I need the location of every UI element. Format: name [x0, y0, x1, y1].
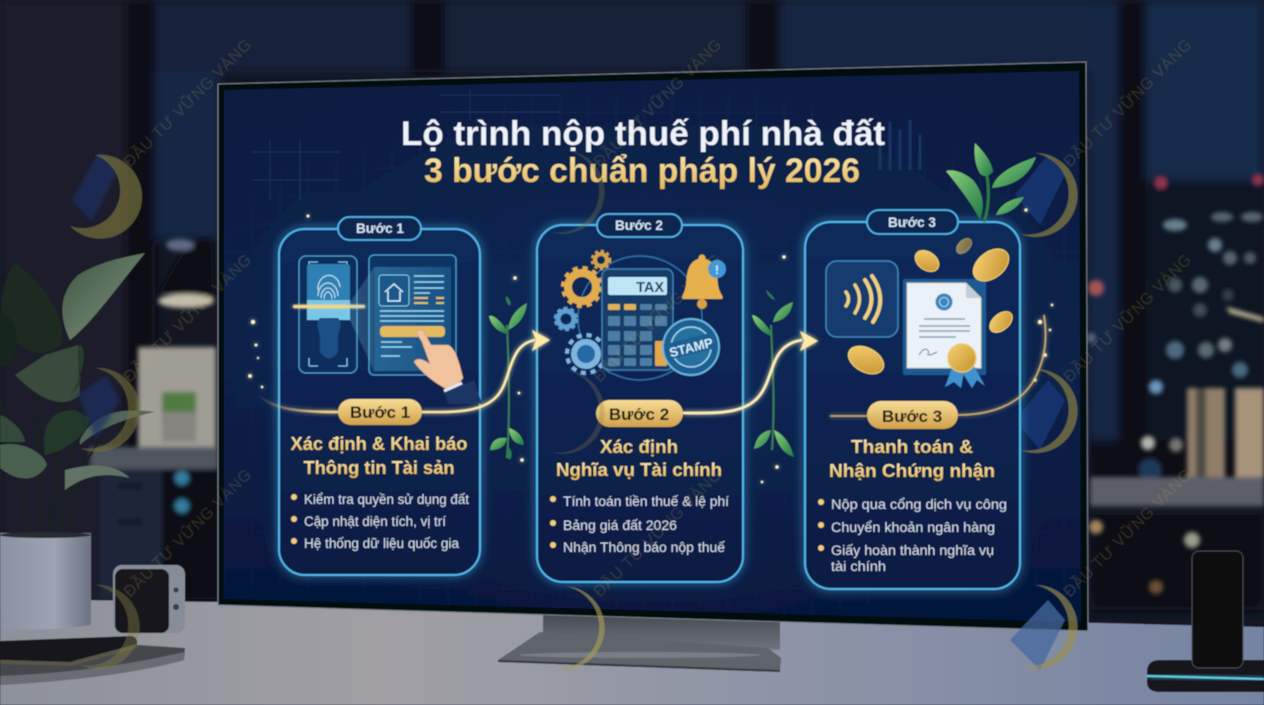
icon: plant between step 2 and 3	[752, 290, 794, 457]
watermark text: ĐẦU TƯ VỮNG VÀNG	[119, 34, 256, 171]
laptop and tablet	[0, 636, 185, 685]
phone on charging stand	[1147, 551, 1264, 692]
icon: fingerprint scanner	[293, 256, 365, 373]
watermark text: ĐẦU TƯ VỮNG VÀNG	[119, 464, 256, 601]
step 2 bullets	[550, 494, 729, 555]
step 2 bullets: Tính toán tiền thuế & lệ phí	[563, 494, 729, 509]
monitor screen	[224, 71, 1081, 622]
step 3 heading	[829, 437, 995, 481]
step 3 tab: Bước 3	[888, 215, 936, 230]
icon: plant on top of step 3	[946, 143, 1036, 222]
title: Lộ trình nộp thuế phí nhà đất	[401, 115, 885, 153]
right office: desk and partitions	[1090, 388, 1264, 513]
step 3 heading: Thanh toán &	[851, 437, 973, 457]
monitor stand	[498, 612, 781, 672]
panel: step 2	[537, 214, 743, 582]
icon: gears and calculator	[555, 251, 702, 380]
step 1 tab: Bước 1	[356, 221, 404, 236]
step 1 pill	[338, 399, 422, 425]
icon: certificate with seal	[903, 279, 986, 388]
step 3 pill: Bước 3	[882, 407, 942, 426]
step 3 pill	[867, 401, 958, 429]
left office: shelf and desk	[90, 347, 218, 599]
step 2 heading: Xác định	[600, 437, 678, 457]
icon: gears and calculator: TAX	[636, 280, 664, 296]
watermark text: ĐẦU TƯ VỮNG VÀNG	[1059, 34, 1196, 171]
step 3 tab	[867, 210, 958, 234]
icon: stamp: STAMP	[668, 335, 715, 360]
step 2 tab: Bước 2	[615, 218, 663, 233]
step 2 tab	[597, 214, 682, 237]
step 2 heading	[556, 437, 722, 480]
icon: notification bell: !	[715, 263, 719, 277]
step 2 pill: Bước 2	[609, 405, 669, 424]
right office: city bokeh lights	[1086, 174, 1264, 594]
watermark text: ĐẦU TƯ VỮNG VÀNG	[1059, 249, 1196, 386]
desk surface	[0, 599, 1264, 705]
step 1 pill: Bước 1	[350, 403, 410, 422]
sparkle dust	[248, 208, 1053, 483]
step 1 heading: Xác định & Khai báo	[290, 434, 468, 454]
step 1 tab	[338, 217, 421, 240]
step 3 bullets: tài chính	[831, 559, 886, 574]
pot	[0, 533, 91, 629]
step 1 bullets: Cập nhật diện tích, vị trí	[304, 514, 446, 529]
wall watermark logos outside monitor	[70, 150, 142, 669]
step 1 bullets	[291, 492, 469, 551]
watermark text	[119, 34, 1196, 601]
watermark text: ĐẦU TƯ VỮNG VÀNG	[589, 249, 726, 386]
golden trail after step 3	[830, 315, 1046, 416]
watermark crescents on screen	[550, 153, 1078, 670]
step 2 bullets: Nhận Thông báo nộp thuế	[563, 540, 726, 555]
panel: step 3	[805, 210, 1020, 589]
screen chart decoration	[252, 90, 920, 200]
title: 3 bước chuẩn pháp lý 2026	[424, 152, 860, 190]
step 3 bullets: Chuyển khoản ngân hàng	[831, 520, 995, 535]
step 3 heading: Nhận Chứng nhận	[829, 461, 995, 481]
panel: step 1	[279, 217, 482, 575]
step 3 bullets: Giấy hoàn thành nghĩa vụ	[831, 543, 994, 558]
step 2 bullets: Bảng giá đất 2026	[563, 518, 677, 533]
step 1 bullets: Kiểm tra quyền sử dụng đất	[304, 492, 469, 507]
monitor frame	[218, 62, 1088, 631]
step 1 bullets: Hệ thống dữ liệu quốc gia	[304, 536, 459, 551]
arrow: step 1 to step 2	[258, 330, 550, 412]
watermark crescent over step 2	[550, 150, 605, 454]
icon: gold coins	[844, 236, 1016, 380]
watermark text: ĐẦU TƯ VỮNG VÀNG	[1059, 464, 1196, 601]
icon: contactless payment	[826, 261, 898, 337]
left office: lamp	[158, 239, 214, 308]
step 3 bullets	[818, 497, 1007, 574]
watermark text: ĐẦU TƯ VỮNG VÀNG	[589, 34, 726, 171]
title	[401, 115, 885, 190]
step 1 heading: Thông tin Tài sản	[304, 458, 454, 478]
icon: house document with hand	[345, 255, 482, 404]
plant in pot	[0, 253, 155, 629]
watermark text: ĐẦU TƯ VỮNG VÀNG	[589, 464, 726, 601]
step 2 pill	[596, 400, 683, 427]
arrow: step 2 to step 3	[683, 331, 818, 413]
icon: plant between step 1 and 2	[489, 296, 527, 460]
watermark text: ĐẦU TƯ VỮNG VÀNG	[119, 249, 256, 386]
icon: notification bell	[682, 254, 726, 309]
step 1 heading	[290, 434, 468, 478]
small speaker cube	[113, 565, 185, 633]
step 3 bullets: Nộp qua cổng dịch vụ công	[831, 497, 1007, 512]
monitor	[218, 62, 1088, 670]
icon: stamp	[663, 319, 719, 375]
step 2 heading: Nghĩa vụ Tài chính	[556, 460, 722, 480]
